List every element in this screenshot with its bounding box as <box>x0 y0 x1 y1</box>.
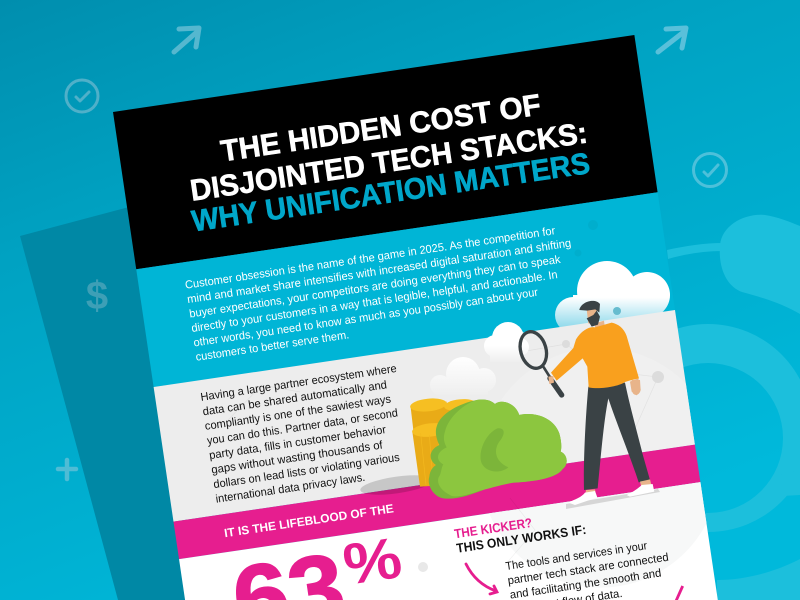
panel: pink band <box>173 445 700 559</box>
shadow <box>359 472 434 498</box>
panel: white section <box>179 482 735 600</box>
kicker body: The tools and services in your <box>505 540 648 573</box>
partner ecosystem paragraph: you can do this. Partner data, or second <box>206 407 399 447</box>
illustration: man with magnifying glass <box>516 301 660 509</box>
cloud behind grey panel <box>555 261 670 335</box>
intro paragraph: Customer obsession is the name of the game in 2025. As the competition for <box>184 225 556 292</box>
icon: check circle left <box>66 80 98 112</box>
partner ecosystem paragraph: compliantly is one of the sawiest ways <box>204 394 392 433</box>
intro paragraph: directly to your customers in a way that is legible, helpful, and actionable. In <box>191 269 558 335</box>
shoe shadow <box>566 489 660 509</box>
bush dark layer <box>429 399 567 499</box>
faint circle on white <box>489 482 706 523</box>
panel: grey section <box>154 310 695 522</box>
partner ecosystem paragraph: international data privacy laws. <box>215 472 366 506</box>
intro network dots <box>574 220 621 315</box>
back panel <box>20 204 200 600</box>
kicker body: partner tech stack are connected <box>507 552 669 587</box>
icon: check circle right <box>694 154 726 186</box>
network decoration <box>228 340 664 572</box>
legs <box>568 380 654 505</box>
title text <box>180 83 594 238</box>
band heading: IT IS THE LIFEBLOOD OF THE <box>223 501 395 540</box>
cloud in front of panel <box>484 322 529 362</box>
bush shade <box>481 428 508 471</box>
partner ecosystem paragraph: Having a large partner ecosystem where <box>200 363 397 404</box>
infographic page <box>113 32 758 600</box>
arrow: kicker left <box>466 564 497 594</box>
intro paragraph: mind and market share intensifies with increased digital saturation and shifting <box>186 238 572 306</box>
kicker heading: THE KICKER? <box>453 515 533 541</box>
lighter circle <box>566 384 695 464</box>
icon: arrow top right <box>658 28 686 52</box>
panel: intro <box>136 192 675 387</box>
big statistic: % <box>339 525 406 598</box>
partner ecosystem paragraph: dollars on lead lists or violating various <box>213 452 401 491</box>
coin stacks <box>409 397 476 487</box>
upper body <box>516 301 641 395</box>
partner ecosystem paragraph: party data, fills in customer behavior <box>208 424 387 462</box>
kicker body <box>505 537 674 600</box>
big statistic <box>226 524 412 600</box>
partner ecosystem paragraph <box>200 363 413 506</box>
intro paragraph: customers to better serve them. <box>195 329 350 364</box>
arrow: kicker right <box>676 586 683 600</box>
partner ecosystem paragraph: data can be shared automatically and <box>202 379 388 418</box>
intro paragraph <box>184 223 581 364</box>
partner ecosystem paragraph: gaps without wasting thousands of <box>211 439 384 477</box>
intro paragraph: other words, you need to know as much as you possibly can about your <box>193 287 539 349</box>
icon: arrow top left <box>174 28 199 52</box>
background headset shape <box>604 215 800 600</box>
icon: plus <box>58 460 76 479</box>
title line 2: DISJOINTED TECH STACKS: <box>188 117 590 208</box>
bush light layer <box>438 399 567 496</box>
illustration: coins and bush <box>359 397 567 499</box>
icon: dollar sign: $ <box>86 274 108 318</box>
lower cloud in front of panel <box>430 357 496 395</box>
kicker heading: THIS ONLY WORKS IF: <box>455 522 587 556</box>
title line 3: WHY UNIFICATION MATTERS <box>190 147 592 238</box>
intro paragraph: buyer expectations, your competitors are doing everything they can to speak <box>189 254 562 321</box>
title line 1: THE HIDDEN COST OF <box>219 89 543 168</box>
kicker heading <box>453 507 587 556</box>
panel: title <box>113 35 658 269</box>
